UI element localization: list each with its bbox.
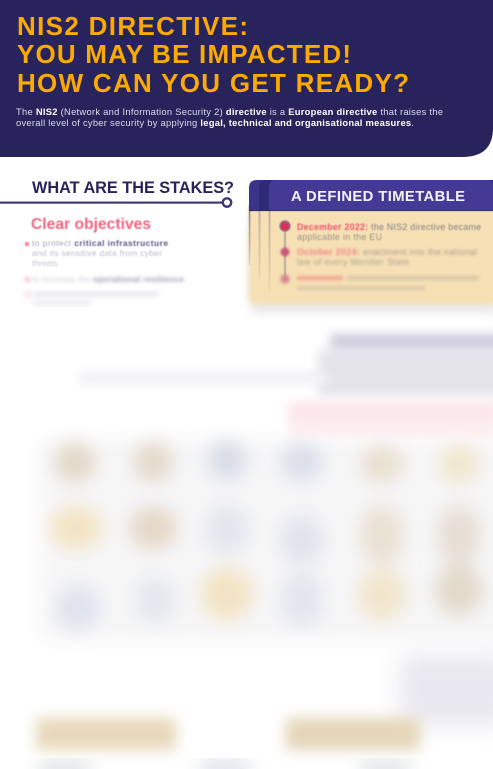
panel: bottom beige heading right	[286, 718, 420, 750]
card body	[249, 205, 493, 304]
timeline step: third date	[280, 274, 479, 290]
heading: what are the stakes	[0, 179, 234, 207]
title: NIS2 DIRECTIVE:	[17, 11, 248, 41]
intro text: The NIS2 (Network and Information Security 2) directive is a European directive that raises the	[16, 106, 443, 117]
title: HOW CAN YOU GET READY?	[17, 68, 409, 98]
icon row 2	[50, 505, 481, 565]
objective: protect critical infrastructure: to protect critical infrastructure	[32, 238, 168, 248]
timeline step: October 2024: law of every Member State	[297, 257, 409, 267]
panel: clear objectives	[25, 216, 184, 304]
objective: operational resilience: to increase the operational resilience	[32, 274, 184, 284]
timeline step: December 2022: December 2022: the NIS2 directive became	[297, 222, 481, 232]
objective: protect critical infrastructure: threats	[32, 258, 58, 268]
bottom row items	[40, 760, 410, 769]
title: YOU MAY BE IMPACTED!	[17, 39, 351, 69]
objective: protect critical infrastructure: and its sensitive data from cyber	[32, 248, 162, 258]
timetable heading: A DEFINED TIMETABLE	[291, 189, 465, 205]
icon row 1	[55, 440, 479, 484]
panel: a defined timetable	[249, 180, 493, 313]
panel: lower light background	[40, 440, 493, 640]
panel: dark band and lilac block	[318, 334, 493, 396]
card headers	[249, 180, 493, 211]
objectives heading: Clear objectives	[31, 216, 151, 233]
panel: right lilac note	[400, 655, 493, 725]
heading: what are the stakes: WHAT ARE THE STAKES?	[32, 179, 234, 197]
title	[17, 11, 409, 98]
intro text	[16, 106, 443, 128]
timeline step: December 2022: applicable in the EU	[297, 232, 382, 242]
panel: pink banner	[288, 402, 493, 438]
timeline step: December 2022	[280, 221, 481, 242]
stacked card edges	[249, 205, 270, 290]
icon row 3	[56, 564, 483, 631]
timeline step: October 2024	[280, 247, 477, 267]
grid of measure icons	[50, 440, 483, 631]
objective: third item	[25, 292, 158, 304]
timeline rail	[284, 226, 286, 276]
timeline step: October 2024: October 2024: enactment into the national	[297, 247, 477, 257]
intro text: overall level of cyber security by applying legal, technical and organisational measures.	[16, 117, 414, 128]
text block: lead-in line	[78, 372, 328, 384]
objective: protect critical infrastructure	[25, 238, 168, 268]
header banner	[0, 0, 493, 157]
card stack shadow	[250, 225, 493, 313]
panel: bottom beige heading left	[36, 718, 176, 750]
